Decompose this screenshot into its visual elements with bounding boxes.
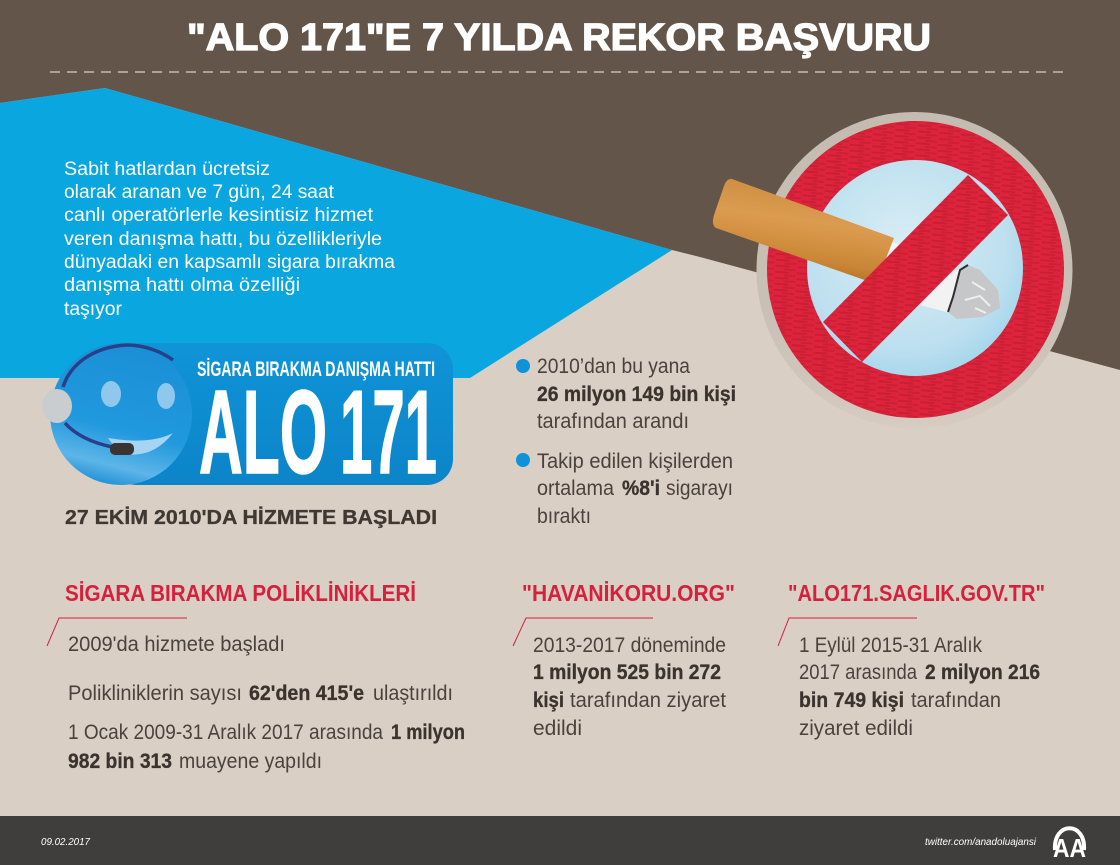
text block: intro: veren danışma hattı, bu özellikleriyle xyxy=(64,229,382,250)
bullet list: 26 milyon 149 bin kişi xyxy=(537,383,736,406)
section: polyclinics: Polikliniklerin sayısı xyxy=(68,682,242,705)
section: havanikoru xyxy=(513,580,735,740)
section: alo171 site: tarafından xyxy=(911,689,1001,712)
section: alo171 site: 1 Eylül 2015-31 Aralık xyxy=(799,634,982,657)
prohibition bar xyxy=(823,175,1008,362)
section: havanikoru: 1 milyon 525 bin 272 xyxy=(533,661,721,684)
bullet list xyxy=(516,355,736,528)
title: "ALO 171"E 7 YILDA REKOR BAŞVURU xyxy=(187,17,931,59)
section: alo171 site: ziyaret edildi xyxy=(799,717,913,740)
section: havanikoru: 2013-2017 döneminde xyxy=(533,634,726,657)
section: polyclinics: 1 milyon xyxy=(391,721,465,744)
text block: intro: olarak aranan ve 7 gün, 24 saat xyxy=(64,182,335,203)
heading: "ALO171.SAGLIK.GOV.TR" xyxy=(788,580,1045,606)
badge plate xyxy=(110,343,453,485)
blue info panel xyxy=(0,88,672,378)
cigarette filter xyxy=(713,179,894,284)
logo: AA xyxy=(1053,833,1086,863)
accent line xyxy=(513,618,653,646)
sign ring xyxy=(767,121,1064,418)
bullet list: sigarayı xyxy=(666,477,733,500)
bullet list: 2010’dan bu yana xyxy=(537,355,690,378)
section: havanikoru: tarafından ziyaret xyxy=(570,689,726,712)
no smoking sign xyxy=(713,112,1072,428)
section: havanikoru: kişi xyxy=(533,689,564,712)
section: polyclinics: 1 Ocak 2009-31 Aralık 2017 arasında xyxy=(68,721,383,744)
divider xyxy=(50,71,1068,73)
bullet list: ortalama xyxy=(537,477,614,500)
start date: 27 EKİM 2010'DA HİZMETE BAŞLADI xyxy=(65,506,437,529)
text block: intro: canlı operatörlerle kesintisiz hizmet xyxy=(64,205,374,226)
text block: intro xyxy=(64,159,395,320)
accent line xyxy=(47,618,187,646)
section: alo171 site: 2017 arasında xyxy=(799,661,917,684)
section: polyclinics: 62'den 415'e xyxy=(249,682,364,705)
badge subtitle: SİGARA BIRAKMA DANIŞMA HATTI xyxy=(197,358,435,381)
bullet list: bıraktı xyxy=(537,505,591,528)
section: polyclinics: 982 bin 313 xyxy=(68,750,172,773)
sign inner xyxy=(807,160,1023,376)
section: polyclinics: muayene yapıldı xyxy=(179,750,322,773)
accent line xyxy=(778,618,917,646)
heading: "HAVANİKORU.ORG" xyxy=(522,580,735,606)
ALO 171 badge xyxy=(42,343,453,499)
text block: intro: danışma hattı olma özelliği xyxy=(64,275,300,296)
ash xyxy=(948,265,1000,319)
bullet dot xyxy=(516,453,530,467)
brown top band xyxy=(0,0,1120,370)
section: alo171 site: bin 749 kişi xyxy=(799,689,904,712)
cigarette paper xyxy=(880,240,962,313)
sign halo xyxy=(756,112,1072,428)
section: alo171 site xyxy=(778,580,1045,740)
bullet list: tarafından arandı xyxy=(537,410,689,433)
section: havanikoru: edildi xyxy=(533,717,582,740)
twitter handle: twitter.com/anadoluajansi xyxy=(925,837,1037,848)
section: polyclinics: 2009'da hizmete başladı xyxy=(68,633,285,656)
section: polyclinics: ulaştırıldı xyxy=(373,682,453,705)
footer xyxy=(0,816,1120,865)
smiley with headset xyxy=(42,343,192,485)
text block: intro: dünyadaki en kapsamlı sigara bırakma xyxy=(64,252,395,273)
bullet dot xyxy=(516,359,530,373)
section: polyclinics xyxy=(47,580,465,773)
bullet list: Takip edilen kişilerden xyxy=(537,450,733,473)
ALO 171 badge: 171 xyxy=(340,366,437,499)
section: alo171 site: 2 milyon 216 xyxy=(925,661,1040,684)
bullet list: %8'i xyxy=(622,477,660,500)
heading: SİGARA BIRAKMA POLİKLİNİKLERİ xyxy=(65,580,416,606)
badge number: ALO xyxy=(199,366,327,499)
date: 09.02.2017 xyxy=(41,837,90,848)
text block: intro: taşıyor xyxy=(64,299,123,320)
text block: intro: Sabit hatlardan ücretsiz xyxy=(64,159,270,180)
